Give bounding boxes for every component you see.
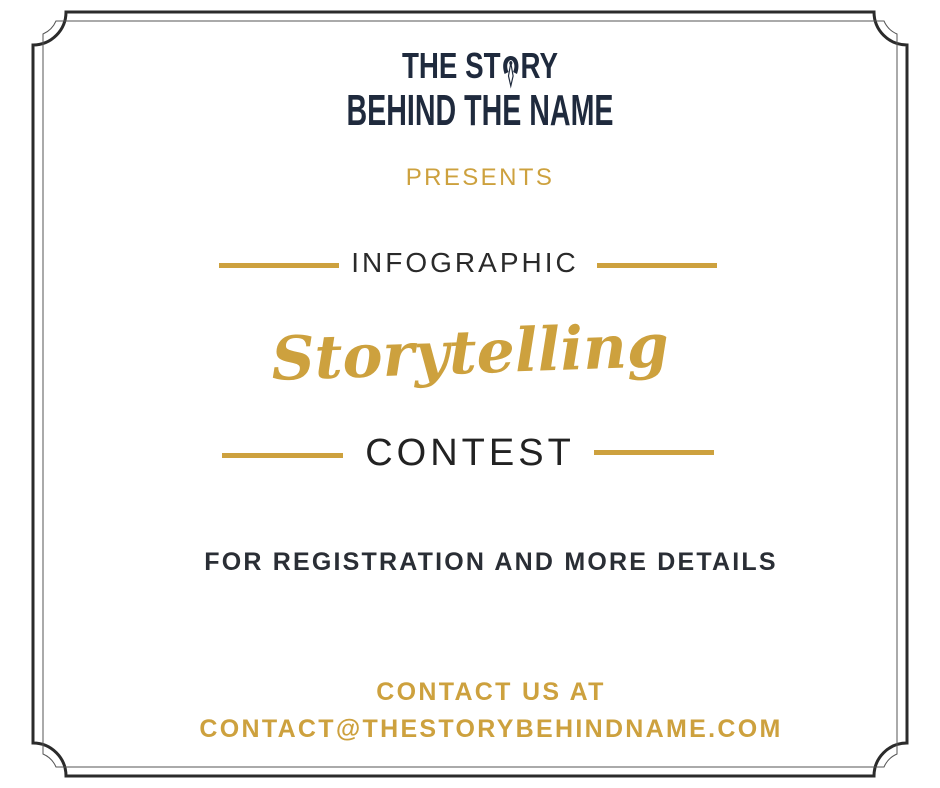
contact block: CONTACT@THESTORYBEHINDNAME.COM	[199, 715, 783, 743]
storytelling script: Storytelling	[270, 311, 670, 395]
presents: PRESENTS	[406, 164, 554, 191]
logo: BEHIND THE NAME	[347, 86, 613, 135]
contest heading: CONTEST	[365, 432, 575, 474]
contact block	[199, 678, 783, 743]
contact block: CONTACT US AT	[376, 678, 606, 706]
logo: THE ST RY	[402, 45, 558, 86]
contest heading	[222, 432, 714, 474]
infographic heading	[219, 247, 717, 278]
registration text: FOR REGISTRATION AND MORE DETAILS	[204, 548, 778, 576]
infographic heading: INFOGRAPHIC	[351, 247, 579, 278]
logo	[347, 45, 613, 135]
